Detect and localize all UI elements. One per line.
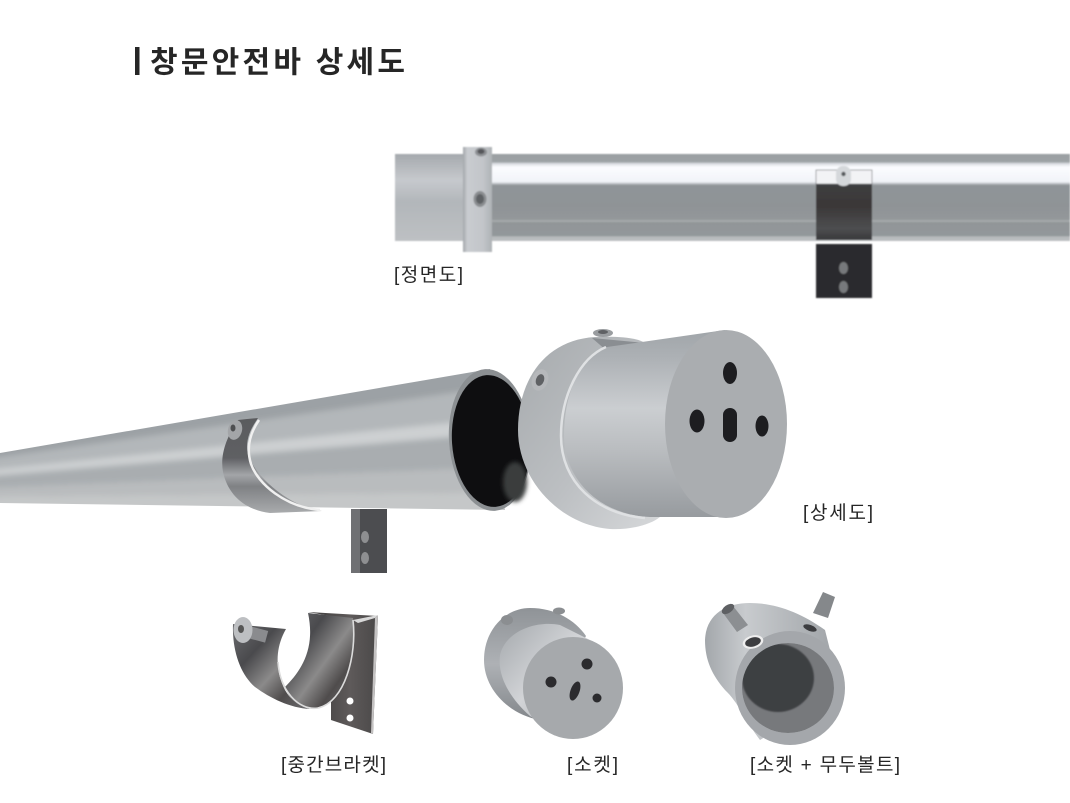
plate edge (371, 615, 378, 734)
middle bracket band (816, 183, 872, 240)
socket with set bolts part (705, 592, 845, 745)
clamp bolt (226, 419, 244, 441)
socket face (523, 637, 623, 739)
title: 창문안전바 상세도 (150, 46, 405, 80)
socket inner bore (742, 643, 834, 733)
bolt hole left (741, 633, 765, 651)
rail end cap (395, 154, 463, 241)
outer curved strap (233, 624, 310, 709)
back plate (308, 612, 378, 734)
label: socket with set bolts: [소켓 + 무두볼트] (750, 754, 900, 776)
plate holes (346, 698, 354, 722)
bolt hole right (802, 623, 818, 633)
bolt in socket (720, 602, 748, 632)
middle bracket part (233, 612, 378, 734)
face holes (690, 362, 768, 442)
label: socket: [소켓] (567, 754, 618, 776)
socket holes (546, 658, 602, 702)
bracket mounting plate (816, 244, 872, 298)
detail view: tube (0, 369, 505, 510)
socket body (564, 330, 735, 517)
label: detail view: [상세도] (803, 502, 873, 524)
tube clamp (222, 418, 322, 513)
flange side bolt (529, 367, 551, 393)
label: middle bracket: [중간브라켓] (281, 754, 386, 776)
bracket bolt head (836, 166, 851, 186)
socket flange (518, 337, 660, 529)
socket rear body (705, 603, 840, 740)
loose set bolt (813, 592, 835, 618)
plate screw holes (839, 262, 848, 293)
socket bolts (501, 608, 565, 625)
bracket top highlight (816, 170, 872, 184)
flange top bolt (593, 329, 613, 337)
collar side screw (474, 191, 486, 207)
rail tube (492, 154, 1070, 241)
socket flange (484, 608, 586, 720)
tube mouth (444, 366, 536, 514)
flange top shade (592, 338, 645, 351)
inner curved wall (285, 613, 353, 708)
socket body (500, 624, 600, 735)
strap rim (278, 620, 354, 708)
front view rail (395, 147, 1070, 298)
collar top screw (475, 148, 487, 156)
clamp plate (351, 509, 387, 573)
socket face (665, 330, 787, 518)
socket part (484, 608, 623, 739)
end collar (463, 147, 492, 252)
label: front view: [정면도] (394, 264, 463, 286)
bracket bolt (234, 617, 268, 643)
socket front ring (735, 631, 845, 745)
plate top edge (353, 615, 378, 623)
large socket (518, 329, 787, 529)
